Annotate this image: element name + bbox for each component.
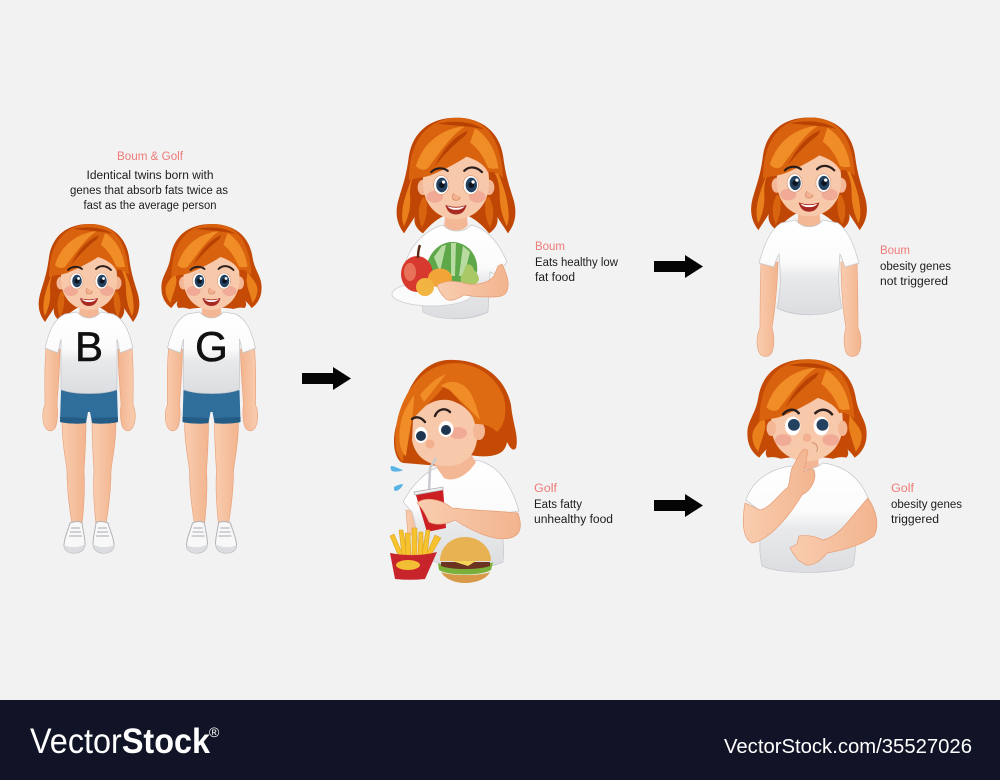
water droplets	[391, 466, 403, 491]
text: Boum obesity genes not triggered: Boum	[880, 245, 910, 257]
text: Boum obesity genes not triggered	[880, 245, 951, 288]
fries box	[390, 552, 437, 580]
text: Golf obesity genes triggered: triggered	[891, 514, 939, 526]
figure: Golf standing with letter G: G	[195, 323, 228, 370]
intro text: Boum and Golf: genes that absorb fats twice as	[70, 185, 228, 197]
figure: Boum holding plate of fruit	[392, 118, 515, 319]
text: Golf eats fatty food: Golf	[534, 483, 558, 495]
figure: Boum standing with letter B: B	[75, 323, 103, 370]
text: Boum eats healthy: Eats healthy low	[535, 257, 619, 269]
resting arm and hand	[790, 498, 877, 565]
raised arm and hand	[743, 449, 815, 543]
arrow: fatty food result	[654, 494, 703, 517]
text: Boum eats healthy	[535, 241, 619, 284]
figure: Golf genes triggered	[743, 359, 877, 572]
text: Golf eats fatty food: Eats fatty	[534, 499, 582, 511]
hand and forearm	[437, 264, 508, 300]
text: Golf obesity genes triggered	[891, 483, 962, 526]
text: Boum obesity genes not triggered: not triggered	[880, 276, 948, 288]
text: Boum eats healthy: Boum	[535, 241, 565, 253]
plate	[392, 282, 472, 306]
drink with straw	[429, 458, 436, 492]
arrow: twins to diets	[302, 367, 351, 390]
footer registered mark: ®	[209, 724, 220, 740]
intro text: Boum and Golf: Boum & Golf	[117, 151, 184, 163]
intro text: Boum and Golf: fast as the average person	[84, 200, 216, 212]
hand and forearm	[417, 499, 520, 539]
text: Boum eats healthy: fat food	[535, 272, 575, 284]
burger	[438, 537, 493, 583]
footer bar	[0, 700, 1000, 780]
oranges	[416, 268, 452, 296]
text: Boum obesity genes not triggered: obesity genes	[880, 261, 951, 273]
figure: Golf eating fast food	[390, 360, 520, 583]
figure: Boum standing with letter B	[39, 224, 139, 553]
footer image id: VectorStock.com/35527026	[724, 736, 972, 758]
text: Golf eats fatty food: unhealthy food	[534, 514, 613, 526]
figure: Golf standing with letter G	[161, 224, 262, 553]
arrow: healthy food result	[654, 255, 703, 278]
text: Golf obesity genes triggered: Golf	[891, 483, 915, 495]
text: Golf obesity genes triggered: obesity genes	[891, 499, 962, 511]
intro text: Boum and Golf: Identical twins born with	[86, 170, 214, 182]
watermelon	[426, 242, 477, 282]
footer logo: VectorStock	[30, 722, 210, 761]
intro text: Boum and Golf	[70, 151, 228, 212]
figure: Boum genes not triggered	[751, 117, 867, 356]
apple	[401, 245, 433, 292]
text: Golf eats fatty food	[534, 483, 613, 526]
pear	[461, 264, 479, 285]
fries	[390, 528, 441, 555]
